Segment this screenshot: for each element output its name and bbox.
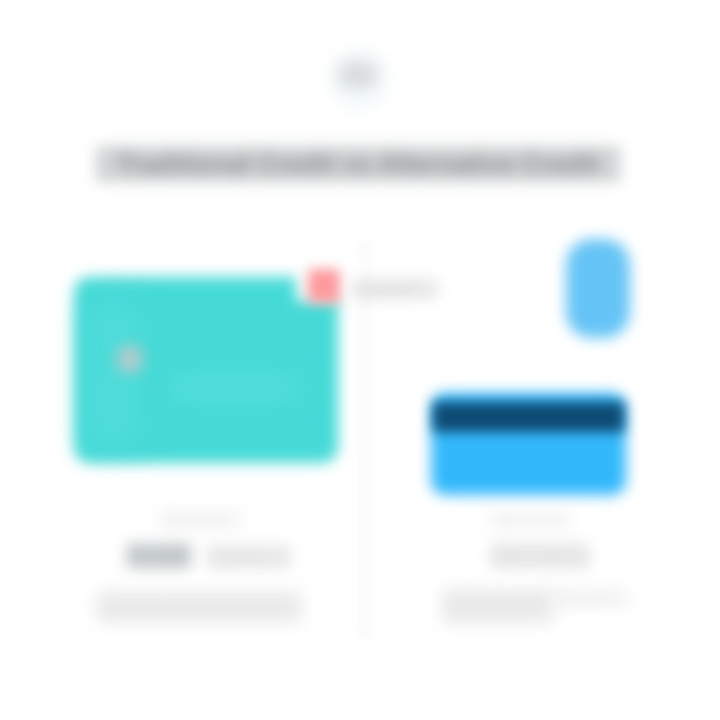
text block: traditional [95, 512, 304, 625]
small label: Option one [160, 512, 224, 527]
chip [117, 345, 143, 373]
description: Flexible pay later [442, 590, 540, 605]
small label [160, 511, 240, 529]
panel: alternative credit [419, 228, 641, 506]
description end [550, 589, 628, 607]
description [442, 589, 554, 623]
panel: traditional credit card [62, 261, 439, 475]
card number highlight [170, 377, 300, 399]
heading second word [207, 545, 291, 569]
description end: and more [550, 590, 605, 605]
divider [358, 240, 372, 640]
magnetic stripe [433, 402, 624, 432]
badge label: Fixed limit [352, 281, 415, 297]
card body [74, 277, 338, 463]
badge label [352, 279, 438, 299]
card body [431, 393, 626, 495]
notch [296, 259, 362, 301]
title: Traditional Credit vs Alternative Credit [117, 149, 599, 179]
heading: Alternative [490, 545, 584, 567]
small label [490, 511, 570, 529]
icon: phone pill [566, 239, 630, 338]
icon: header emblem [330, 50, 386, 104]
small label: Option two [490, 512, 552, 527]
card left sheen [90, 305, 140, 445]
text block: alternative [440, 512, 621, 626]
description: instalment plans [442, 607, 536, 622]
description [97, 591, 302, 623]
badge: red marker [308, 269, 340, 303]
description: Revolving credit with interest [97, 598, 288, 615]
